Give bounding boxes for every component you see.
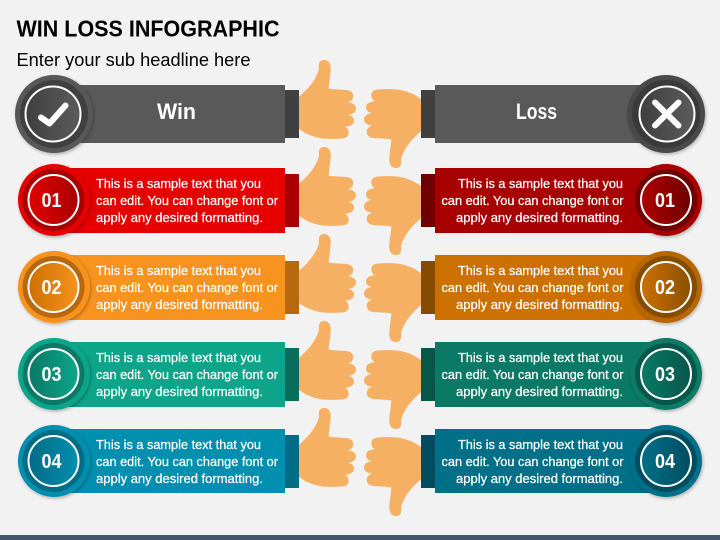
title: WIN LOSS INFOGRAPHIC xyxy=(16,16,280,42)
loss row 01: apply any desired formatting. xyxy=(456,211,623,225)
win row 01: can edit. You can change font or xyxy=(96,194,278,208)
loss row 03 xyxy=(421,338,702,410)
win row 01 xyxy=(18,164,299,236)
win row 03: can edit. You can change font or xyxy=(96,368,278,382)
loss row 03: 03 xyxy=(655,364,675,386)
sub headline: Enter your sub headline here xyxy=(16,50,250,70)
thumb up 03 xyxy=(299,321,356,400)
loss row 04 xyxy=(421,425,702,497)
win row 01: 01 xyxy=(42,190,62,212)
win row 03 xyxy=(18,338,299,410)
win row 02: apply any desired formatting. xyxy=(96,298,263,312)
thumb up: Win xyxy=(299,60,356,139)
win row 04: apply any desired formatting. xyxy=(96,472,263,486)
win row 04: 04 xyxy=(42,451,62,473)
thumb up 04 xyxy=(299,408,356,487)
loss row 02: 02 xyxy=(655,277,675,299)
thumb down 04 xyxy=(364,437,421,516)
win row 02: This is a sample text that you xyxy=(96,264,261,278)
win row 04 xyxy=(18,425,299,497)
loss row 02: apply any desired formatting. xyxy=(456,298,623,312)
loss row 02: This is a sample text that you xyxy=(458,264,623,278)
thumb down 03 xyxy=(364,350,421,429)
thumb up 02 xyxy=(299,234,356,313)
thumb down 02 xyxy=(364,263,421,342)
loss row 03: apply any desired formatting. xyxy=(456,385,623,399)
win row 02 xyxy=(18,251,299,323)
thumb up 01 xyxy=(299,147,356,226)
win row 03: apply any desired formatting. xyxy=(96,385,263,399)
win row 03: This is a sample text that you xyxy=(96,351,261,365)
header: Loss: Loss xyxy=(516,99,557,124)
win row 03: 03 xyxy=(42,364,62,386)
loss row 04: apply any desired formatting. xyxy=(456,472,623,486)
win row 04: can edit. You can change font or xyxy=(96,455,278,469)
win row 02: can edit. You can change font or xyxy=(96,281,278,295)
win row 04: This is a sample text that you xyxy=(96,438,261,452)
thumb down: Loss xyxy=(364,89,421,168)
loss row 04: 04 xyxy=(655,451,676,473)
win row 01: This is a sample text that you xyxy=(96,177,261,191)
header: Win xyxy=(15,75,299,153)
loss row 04: can edit. You can change font or xyxy=(442,455,624,469)
thumb down 01 xyxy=(364,176,421,255)
loss row 01: 01 xyxy=(655,190,675,212)
loss row 02: can edit. You can change font or xyxy=(442,281,624,295)
loss row 01: This is a sample text that you xyxy=(458,177,623,191)
header: Loss xyxy=(421,75,705,153)
loss row 03: This is a sample text that you xyxy=(458,351,623,365)
header: Win: Win xyxy=(157,99,196,124)
footer bar xyxy=(0,535,720,540)
win row 01: apply any desired formatting. xyxy=(96,211,263,225)
loss row 03: can edit. You can change font or xyxy=(442,368,624,382)
loss row 04: This is a sample text that you xyxy=(458,438,623,452)
win row 02: 02 xyxy=(42,277,62,299)
loss row 01: can edit. You can change font or xyxy=(442,194,624,208)
loss row 01 xyxy=(421,164,702,236)
loss row 02 xyxy=(421,251,702,323)
